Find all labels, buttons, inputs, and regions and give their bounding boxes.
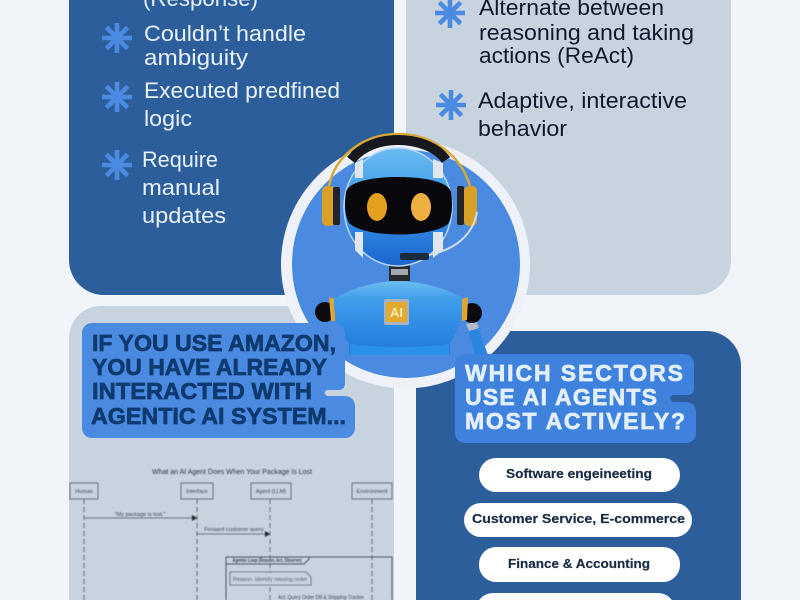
actor boxes: Interface (186, 489, 208, 495)
sequence diagram (70, 467, 392, 600)
robot shoulders (315, 297, 482, 323)
icon: star 4 (435, 0, 465, 28)
pill: software: Software engeineeting (506, 466, 652, 481)
text: ambiguity: Couldn’t handle (144, 21, 306, 46)
text: manual updates: manual (142, 175, 220, 200)
chest chip (384, 299, 409, 325)
pill: fourth sector (476, 593, 675, 600)
text: adaptive: Adaptive, interactive (478, 88, 687, 113)
circle backdrop (281, 140, 530, 388)
icon: star 2 (102, 82, 132, 112)
actor boxes: Human (75, 489, 93, 495)
text: predefined logic: Executed predfined (144, 78, 340, 103)
robot body (334, 281, 462, 355)
heading: sectors: USE AI AGENTS (465, 384, 657, 410)
heading: amazon (82, 323, 355, 438)
message arrows: "My package is lost." (115, 512, 165, 518)
actor boxes: Agent (LLM) (256, 489, 286, 495)
icon: robot (315, 134, 488, 355)
icon: star 1 (102, 23, 132, 53)
text: ambiguity: ambiguity (144, 45, 248, 70)
heading: sectors: MOST ACTIVELY? (465, 408, 685, 434)
icon: star 3 (102, 150, 132, 180)
text: manual updates: Require (142, 147, 218, 172)
icon: star 5 (436, 90, 466, 120)
panel: sectors (416, 331, 741, 600)
chest chip: AI (390, 305, 403, 320)
robot medallion (281, 134, 530, 388)
pill: finance (479, 547, 680, 582)
message arrows: Forward customer query (204, 527, 264, 533)
text: predefined logic (144, 78, 340, 131)
text: manual updates: updates (142, 203, 226, 228)
message arrows (84, 512, 270, 537)
pill: software (479, 458, 680, 492)
pill: customer service (464, 503, 692, 537)
agentic loop frame: Agentic Loop (Reason, Act, Observe) (232, 558, 302, 564)
heading: sectors (455, 354, 696, 443)
text: adaptive: behavior (478, 116, 567, 141)
actor boxes (70, 483, 392, 499)
text: react (479, 0, 694, 68)
heading: amazon: IF YOU USE AMAZON, (92, 330, 336, 356)
heading: amazon: YOU HAVE ALREADY (92, 354, 327, 380)
robot arm (466, 321, 488, 355)
body base band (350, 344, 449, 355)
panel: amazon example (69, 306, 394, 600)
heading: amazon: AGENTIC AI SYSTEM... (91, 403, 346, 429)
text: adaptive (478, 88, 687, 141)
panel: traditional systems (69, 0, 394, 295)
text: ambiguity (144, 21, 306, 70)
agentic loop frame (226, 557, 392, 600)
actor boxes: Environment (357, 489, 388, 495)
pill: customer service: Customer Service, E-commerce (472, 511, 685, 526)
robot neck (389, 264, 410, 281)
agentic loop frame: Reason: Identify missing order (233, 577, 307, 583)
robot head (344, 148, 452, 266)
heading: sectors: WHICH SECTORS (465, 360, 683, 386)
diagram title: What an AI Agent Does When Your Package Is Lost (152, 467, 312, 476)
visor (345, 177, 452, 234)
text: manual updates (142, 147, 226, 228)
panel: agentic systems (406, 0, 731, 295)
text: react: reasoning and taking (479, 20, 694, 45)
text: react: actions (ReAct) (479, 43, 634, 68)
pill: finance: Finance & Accounting (508, 556, 650, 571)
text: predefined logic: logic (144, 106, 192, 131)
lifelines (84, 499, 372, 600)
headset (322, 134, 477, 260)
eyes (367, 193, 431, 221)
heading: amazon: INTERACTED WITH (92, 378, 312, 404)
